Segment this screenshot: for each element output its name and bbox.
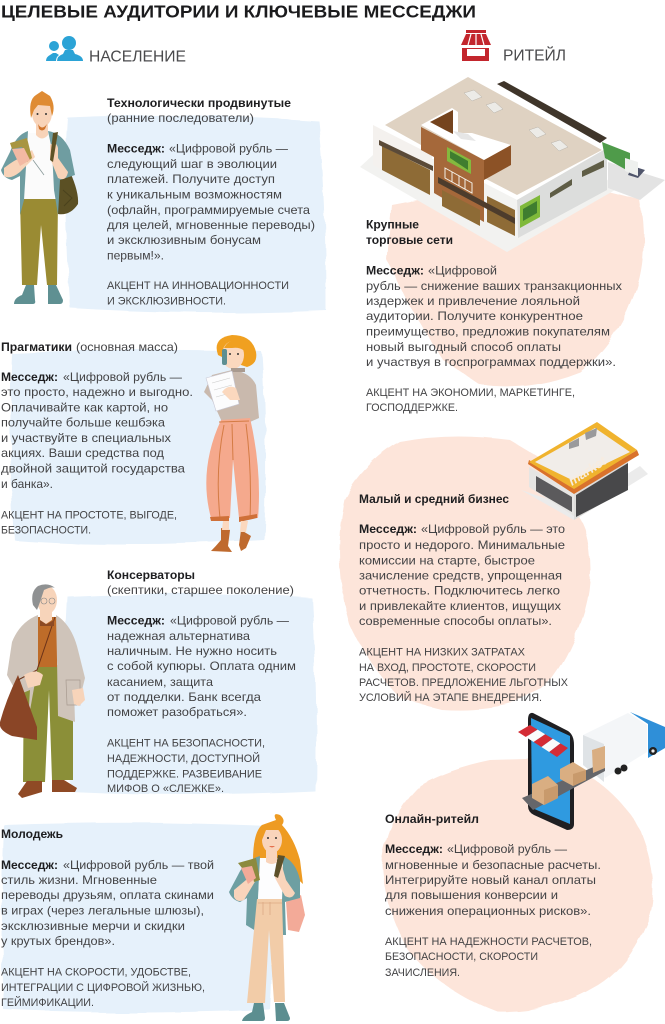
text block: online retail: ЗАЧИСЛЕНИЯ.: [385, 967, 460, 979]
panel background: online retail: [382, 758, 653, 1012]
illustration: small market building: [521, 422, 648, 520]
text block: pragmatists: «Цифровой рубль —: [63, 370, 182, 384]
panel background: pragmatists: [10, 350, 266, 544]
text block: youth: у крутых брендов».: [1, 934, 115, 948]
text block: online retail: [385, 812, 601, 979]
text block: pragmatists: Прагматики: [1, 340, 72, 354]
text block: pragmatists: Месседж:: [1, 370, 58, 384]
text block: pragmatists: (основная масса): [76, 340, 178, 354]
text block: conservatives: надежная альтернатива: [107, 629, 250, 643]
text block: small and medium business: зачисление средств, упрощенная: [359, 568, 562, 582]
text block: large retail chains: «Цифровой: [428, 264, 497, 278]
text block: small and medium business: Месседж:: [359, 522, 417, 536]
illustration: phone with delivery truck: [518, 712, 665, 830]
text block: large retail chains: торговые сети: [366, 233, 453, 247]
text block: conservatives: поможет разобраться».: [107, 705, 247, 719]
text block: conservatives: от подделки. Банк всегда: [107, 690, 261, 704]
text block: conservatives: касанием, защита: [107, 675, 213, 689]
text block: pragmatists: [1, 340, 193, 536]
text block: online retail: БЕЗОПАСНОСТИ, СКОРОСТИ: [385, 951, 538, 963]
text block: technologically advanced: Технологически продвинутые: [107, 96, 291, 110]
illustration: conservative older man: [0, 584, 85, 798]
text block: online retail: АКЦЕНТ НА НАДЕЖНОСТИ РАСЧЕТОВ,: [385, 936, 592, 948]
illustration: small market building: market: [565, 453, 609, 489]
text block: online retail: Онлайн-ритейл: [385, 812, 479, 826]
text block: technologically advanced: и эксклюзивным бонусам: [107, 233, 261, 247]
text block: large retail chains: рубль — снижение ваших транзакционных: [366, 279, 622, 293]
text block: technologically advanced: (ранние последователи): [107, 111, 254, 125]
text block: technologically advanced: платежей. Получите доступ: [107, 172, 275, 186]
text block: conservatives: «Цифровой рубль —: [170, 614, 289, 628]
text block: small and medium business: НА ВХОД, ПРОСТОТЕ, СКОРОСТИ: [359, 662, 536, 674]
text block: conservatives: НАДЕЖНОСТИ, ДОСТУПНОЙ: [107, 752, 260, 765]
text block: large retail chains: [366, 218, 622, 414]
text block: small and medium business: современные способы оплаты».: [359, 614, 552, 628]
text block: pragmatists: это просто, надежно и выгодно.: [1, 385, 193, 399]
text block: technologically advanced: «Цифровой рубль —: [169, 142, 288, 156]
text block: small and medium business: Малый и средний бизнес: [359, 492, 509, 506]
text block: conservatives: АКЦЕНТ НА БЕЗОПАСНОСТИ,: [107, 738, 265, 750]
text block: technologically advanced: к уникальным возможностям: [107, 188, 282, 202]
text block: small and medium business: АКЦЕНТ НА НИЗКИХ ЗАТРАТАХ: [359, 646, 525, 658]
text block: large retail chains: новый выгодный способ оплаты: [366, 340, 561, 354]
text block: large retail chains: АКЦЕНТ НА ЭКОНОМИИ, МАРКЕТИНГЕ,: [366, 387, 575, 399]
text block: youth: в играх (через легальные шлюзы),: [1, 904, 204, 918]
text block: large retail chains: преимущество, предложив покупателям: [366, 324, 610, 338]
panel background: small and medium business: [340, 436, 590, 709]
text block: large retail chains: ГОСПОДДЕРЖКЕ.: [366, 402, 458, 414]
illustration: young woman with backpack: [229, 814, 305, 1021]
heading: population: НАСЕЛЕНИЕ: [89, 48, 186, 66]
text block: online retail: мгновенные и безопасные расчеты.: [385, 858, 601, 872]
text block: conservatives: Месседж:: [107, 614, 165, 628]
text block: small and medium business: [359, 492, 568, 704]
text block: small and medium business: «Цифровой рубль — это: [421, 522, 565, 536]
text block: technologically advanced: первым!».: [107, 248, 164, 262]
text block: large retail chains: аудитории. Получите конкурентное: [366, 309, 583, 323]
text block: pragmatists: акциях. Ваши средства под: [1, 446, 164, 460]
text block: youth: «Цифровой рубль — твой: [63, 858, 214, 872]
text block: small and medium business: просто и недорого. Минимальные: [359, 538, 565, 552]
text block: small and medium business: комиссии на старте, быстрое: [359, 554, 535, 568]
text block: small and medium business: УСЛОВИЙ НА ЭТАПЕ ВНЕДРЕНИЯ.: [359, 691, 542, 704]
text block: pragmatists: и банка».: [1, 477, 53, 491]
text block: online retail: Интегрируйте новый канал оплаты: [385, 873, 596, 887]
text block: large retail chains: Месседж:: [366, 264, 424, 278]
text block: youth: ГЕЙМИФИКАЦИИ.: [1, 996, 94, 1009]
text block: pragmatists: и участвуйте в специальных: [1, 431, 171, 445]
text block: youth: [1, 827, 214, 1009]
illustration: pragmatist woman with phone: [204, 335, 259, 552]
text block: technologically advanced: [107, 96, 315, 308]
text block: conservatives: [107, 568, 296, 795]
text block: technologically advanced: АКЦЕНТ НА ИННОВАЦИОННОСТИ: [107, 280, 289, 292]
text block: youth: эксклюзивные мерчи и скидки: [1, 919, 185, 933]
illustration: large retail store building: [360, 74, 665, 252]
text block: online retail: Месседж:: [385, 842, 443, 856]
text block: small and medium business: и привлекайте клиентов, ищущих: [359, 599, 561, 613]
text block: youth: АКЦЕНТ НА СКОРОСТИ, УДОБСТВЕ,: [1, 966, 191, 978]
heading: retail: РИТЕЙЛ: [503, 46, 566, 64]
text block: conservatives: с собой купюры. Оплата одним: [107, 659, 296, 673]
text block: online retail: для повышения конверсии и: [385, 888, 558, 902]
text block: online retail: «Цифровой рубль —: [447, 842, 567, 856]
text block: youth: Молодежь: [1, 827, 63, 841]
text block: technologically advanced: Месседж:: [107, 142, 165, 156]
text block: pragmatists: АКЦЕНТ НА ПРОСТОТЕ, ВЫГОДЕ,: [1, 510, 177, 522]
text block: pragmatists: БЕЗОПАСНОСТИ.: [1, 524, 91, 536]
illustration: tech-savvy young man: [1, 91, 78, 304]
text block: large retail chains: Крупные: [366, 218, 419, 232]
text block: youth: Месседж:: [1, 858, 58, 872]
text block: conservatives: МИФОВ О «СЛЕЖКЕ».: [107, 783, 224, 795]
text block: large retail chains: и участвуя в госпрограммах поддержки».: [366, 355, 616, 369]
text block: conservatives: наличным. Не нужно носить: [107, 644, 277, 658]
text block: online retail: снижения операционных рисков».: [385, 904, 591, 918]
text block: youth: стиль жизни. Мгновенные: [1, 873, 157, 887]
text block: conservatives: ПОДДЕРЖКЕ. РАЗВЕИВАНИЕ: [107, 768, 262, 780]
icon: population: [46, 36, 83, 61]
text block: pragmatists: двойной защитой государства: [1, 462, 185, 476]
text block: small and medium business: отчетность. Подключитесь легко: [359, 584, 560, 598]
text block: pragmatists: получайте больше кешбэка: [1, 416, 165, 430]
text block: technologically advanced: для целей, мгновенные переводы): [107, 218, 315, 232]
text block: youth: ИНТЕГРАЦИИ С ЦИФРОВОЙ ЖИЗНЬЮ,: [1, 981, 205, 994]
text block: technologically advanced: И ЭКСКЛЮЗИВНОСТИ.: [107, 296, 226, 308]
text block: conservatives: (скептики, старшее поколение): [107, 583, 294, 597]
text block: technologically advanced: следующий шаг в эволюции: [107, 157, 277, 171]
text block: youth: переводы друзьям, оплата скинами: [1, 888, 214, 902]
text block: conservatives: Консерваторы: [107, 568, 195, 582]
text block: large retail chains: издержек и привлечение лояльной: [366, 294, 580, 308]
panel background: conservatives: [65, 594, 316, 795]
text block: small and medium business: РАСЧЕТОВ. ПРЕДЛОЖЕНИЕ ЛЬГОТНЫХ: [359, 677, 568, 689]
title: ЦЕЛЕВЫЕ АУДИТОРИИ И КЛЮЧЕВЫЕ МЕССЕДЖИ: [1, 2, 476, 22]
panel background: youth: [2, 823, 273, 1013]
panel background: technologically advanced: [65, 115, 326, 313]
icon: retail store: [461, 30, 491, 61]
text block: technologically advanced: (офлайн, программируемые счета: [107, 203, 310, 217]
text block: pragmatists: Оплачивайте как картой, но: [1, 400, 168, 414]
panel background: large retail: [387, 190, 644, 387]
